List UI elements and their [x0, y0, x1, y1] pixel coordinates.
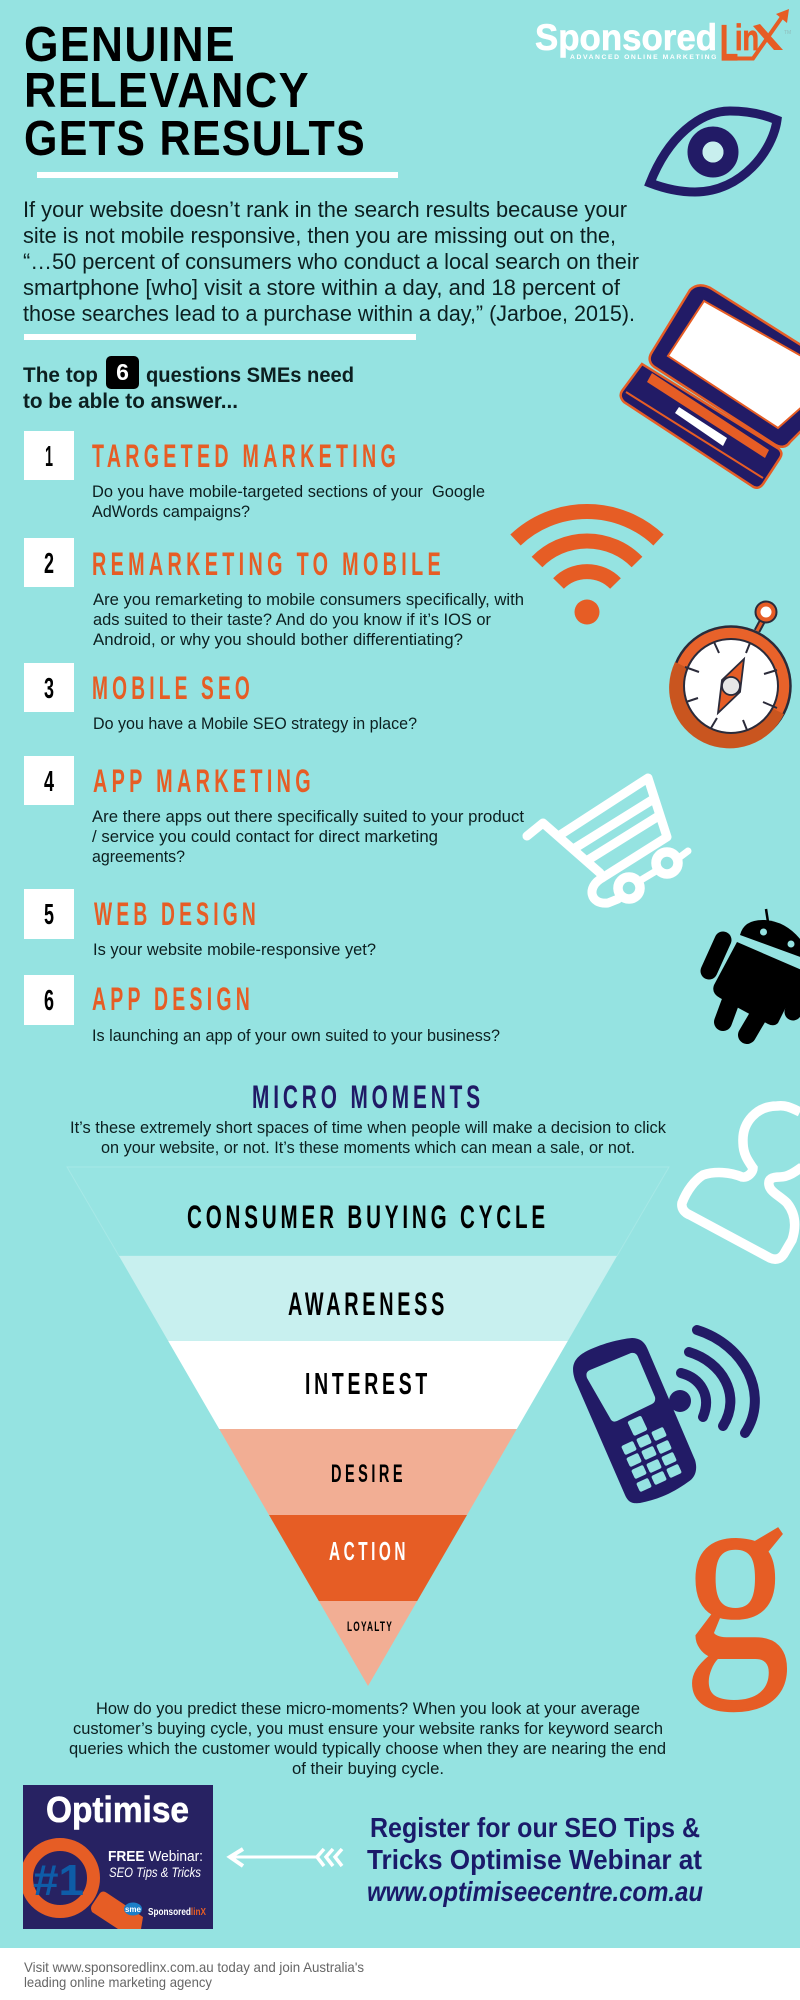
webinar banner: Optimise	[46, 1789, 189, 1830]
icon: eye	[650, 111, 777, 192]
heading: top 6 questions: to be able to answer...	[23, 390, 238, 413]
badge: number 6: 6	[116, 359, 129, 385]
icon: wifi	[516, 512, 658, 624]
question 2: remarketing to mobile: ads suited to their taste? And do you know if it’s IOS or	[93, 611, 491, 629]
webinar call to action: www.optimiseecentre.com.au	[367, 1876, 703, 1907]
funnel: consumer buying cycle	[67, 1167, 669, 1686]
webinar banner: SEO Tips & Tricks	[109, 1864, 201, 1880]
question 6: app design	[24, 975, 500, 1045]
question 3: mobile seo: 3	[44, 673, 54, 705]
title: GETS RESULTS	[24, 112, 366, 166]
funnel band: interest: INTEREST	[305, 1366, 431, 1401]
closing paragraph: of their buying cycle.	[292, 1759, 444, 1778]
webinar banner: SponsoredlinX	[148, 1907, 206, 1918]
question 6: app design: APP DESIGN	[92, 981, 254, 1017]
logo: SponsoredLinX: in	[735, 17, 759, 58]
icon: laptop	[621, 285, 800, 488]
funnel band: interest	[168, 1341, 568, 1429]
question 5: web design: WEB DESIGN	[94, 896, 260, 932]
icon: mobile phone with signal	[573, 1330, 755, 1503]
intro paragraph: those searches lead to a purchase within a day,” (Jarboe, 2015).	[23, 301, 635, 326]
funnel band: title	[67, 1167, 669, 1256]
question 4: app marketing: APP MARKETING	[93, 763, 315, 799]
intro paragraph: site is not mobile responsive, then you are missing out on the,	[23, 223, 616, 248]
micro moments description	[70, 1118, 666, 1157]
intro paragraph: “…50 percent of consumers who conduct a local search on their	[23, 249, 639, 274]
webinar banner: FREE Webinar:	[108, 1848, 203, 1865]
magnifier with #1	[26, 1844, 143, 1929]
heading: top 6 questions: The top	[23, 364, 98, 387]
logo: SponsoredLinX: TM	[784, 30, 791, 36]
funnel band: title: CONSUMER BUYING CYCLE	[187, 1199, 549, 1235]
title: RELEVANCY	[24, 64, 310, 118]
question 1: targeted marketing	[24, 431, 485, 521]
question 3: mobile seo: MOBILE SEO	[92, 670, 254, 706]
webinar call to action: Register for our SEO Tips &	[370, 1812, 700, 1843]
funnel band: action: ACTION	[329, 1536, 409, 1566]
funnel band: desire	[219, 1429, 517, 1515]
sme logo	[124, 1902, 142, 1916]
logo: SponsoredLinX: L	[720, 15, 738, 71]
logo: SponsoredLinX: ADVANCED ONLINE MARKETING	[570, 54, 718, 61]
intro paragraph: If your website doesn’t rank in the search results because your	[23, 197, 627, 222]
heading: micro moments: MICRO MOMENTS	[252, 1079, 484, 1115]
question 3: mobile seo: Do you have a Mobile SEO strategy in place?	[93, 715, 417, 733]
closing paragraph: How do you predict these micro-moments? When you look at your average	[96, 1699, 640, 1718]
question 4: app marketing: 4	[44, 766, 54, 798]
title	[24, 18, 366, 166]
question 2: remarketing to mobile: Are you remarketing to mobile consumers specifically, with	[93, 591, 524, 609]
question 6: app design: 6	[44, 985, 54, 1017]
heading: top 6 questions	[23, 356, 354, 413]
intro paragraph: smartphone [who] visit a store within a day, and 18 percent of	[23, 275, 621, 300]
funnel band: loyalty	[319, 1601, 417, 1686]
question 4: app marketing: agreements?	[92, 848, 185, 866]
question 1: targeted marketing: Do you have mobile-targeted sections of your Google	[92, 483, 485, 501]
funnel band: action	[269, 1515, 467, 1601]
icon: shopping cart	[527, 778, 688, 903]
divider under title	[37, 172, 398, 178]
icon: compass	[669, 602, 790, 748]
funnel band: loyalty: LOYALTY	[347, 1618, 393, 1634]
icon: android robot	[709, 909, 800, 1035]
question 4: app marketing: / service you could contact for direct marketing	[92, 828, 438, 846]
footer	[0, 1948, 800, 2000]
question 5: web design: Is your website mobile-responsive yet?	[93, 941, 376, 959]
footer: leading online marketing agency	[24, 1974, 212, 1990]
closing paragraph: queries which the customer would typically choose when they are nearing the end	[69, 1739, 666, 1758]
funnel band: desire: DESIRE	[331, 1460, 406, 1488]
intro paragraph	[23, 197, 639, 326]
logo: SponsoredLinX: Sponsored	[535, 17, 717, 58]
question 1: targeted marketing: TARGETED MARKETING	[92, 438, 400, 474]
closing paragraph	[69, 1699, 666, 1778]
micro moments description: on your website, or not. It’s these moments which can mean a sale, or not.	[101, 1138, 635, 1157]
question 2: remarketing to mobile: REMARKETING TO MOBILE	[92, 546, 445, 582]
arrow pointing to webinar banner	[229, 1849, 342, 1866]
footer: Visit www.sponsoredlinx.com.au today and join Australia's	[24, 1959, 364, 1975]
funnel band: awareness: AWARENESS	[288, 1286, 448, 1322]
divider under paragraph	[24, 334, 416, 340]
badge: number 6	[106, 356, 139, 389]
question 6: app design: Is launching an app of your own suited to your business?	[92, 1027, 500, 1045]
closing paragraph: customer’s buying cycle, you must ensure your website ranks for keyword search	[73, 1719, 663, 1738]
title: GENUINE	[24, 18, 236, 72]
question 4: app marketing	[24, 756, 524, 866]
question 5: web design	[24, 889, 376, 959]
question 4: app marketing: Are there apps out there specifically suited to your product	[92, 808, 524, 826]
magnifier with #1: #1	[33, 1856, 84, 1905]
icon: person outline	[682, 1106, 800, 1259]
webinar call to action	[367, 1812, 703, 1907]
webinar call to action: Tricks Optimise Webinar at	[367, 1844, 702, 1875]
question 2: remarketing to mobile: Android, or why you should bother differentiating?	[93, 631, 463, 649]
sme logo: sme	[125, 1905, 142, 1914]
question 1: targeted marketing: 1	[45, 441, 53, 473]
micro moments description: It’s these extremely short spaces of time when people will make a decision to click	[70, 1118, 666, 1137]
question 2: remarketing to mobile: 2	[44, 548, 54, 580]
heading: top 6 questions: questions SMEs need	[146, 364, 354, 387]
question 5: web design: 5	[44, 899, 54, 931]
question 3: mobile seo	[24, 663, 417, 733]
question 1: targeted marketing: AdWords campaigns?	[92, 503, 250, 521]
webinar banner	[23, 1785, 213, 1929]
question 2: remarketing to mobile	[24, 538, 524, 649]
funnel band: awareness	[119, 1256, 617, 1341]
logo: SponsoredLinX	[535, 9, 791, 71]
